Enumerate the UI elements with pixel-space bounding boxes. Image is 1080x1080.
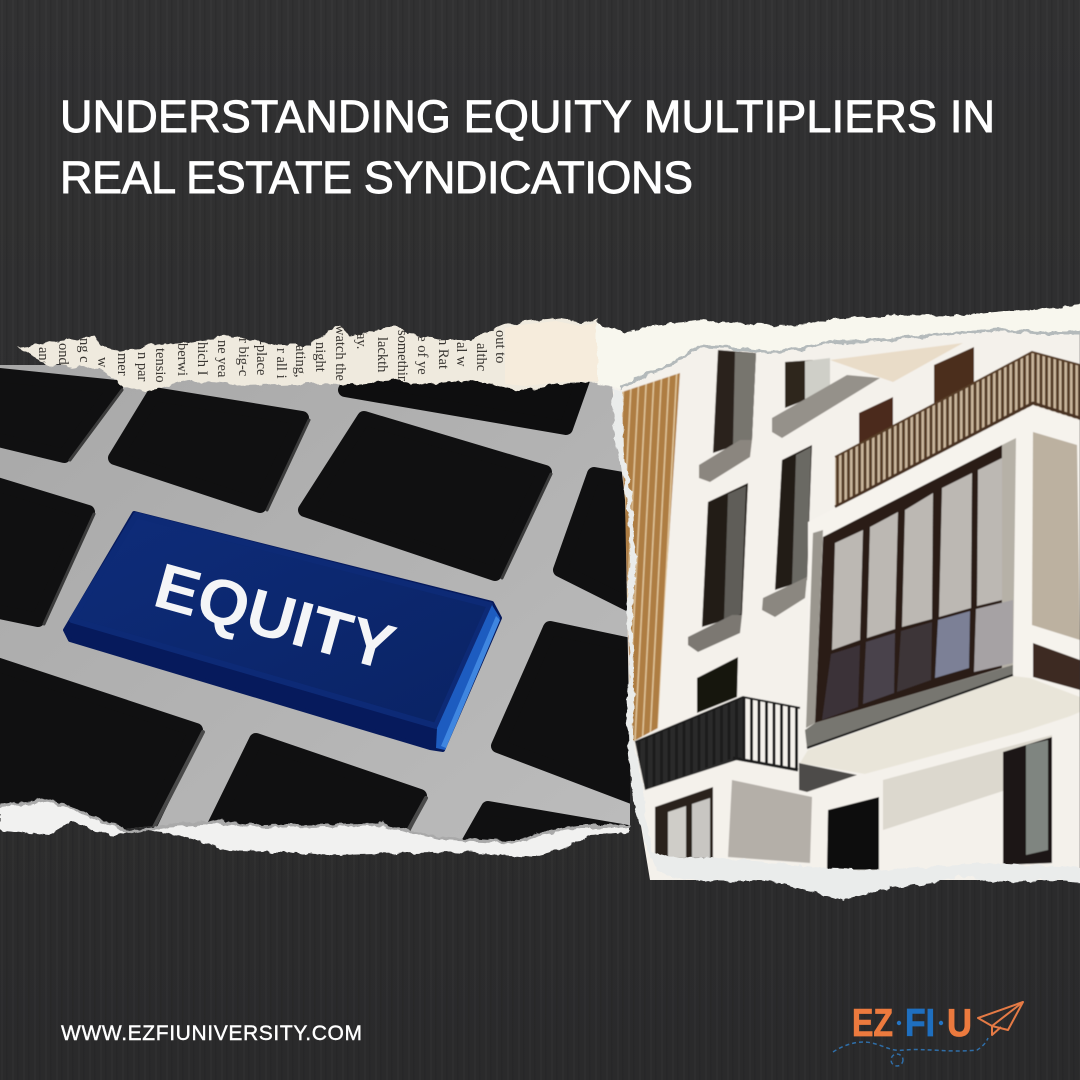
logo: EZ FI U with paper plane: FI [905, 1002, 935, 1045]
flight path [833, 1038, 988, 1066]
newspaper text columns: watch the [332, 325, 348, 381]
website url: WWW.EZFIUNIVERSITY.COM [61, 1022, 362, 1045]
newspaper text columns: hich I [194, 342, 210, 376]
lower balcony base [645, 758, 812, 870]
upper windows [713, 350, 756, 453]
logo: EZ FI U with paper plane [833, 1002, 1023, 1066]
newspaper text columns: ne yea [214, 340, 230, 378]
newspaper text columns: r big-c [235, 338, 251, 376]
newspaper text columns: night [312, 342, 328, 372]
bay box [807, 488, 874, 552]
torn newspaper strip [16, 318, 600, 392]
wood slat cladding [622, 373, 680, 742]
newspaper text columns: n par [134, 352, 150, 382]
newspaper text columns: ating, [292, 345, 308, 378]
newspaper text columns: and [35, 347, 51, 369]
upper railing [835, 352, 1080, 507]
newspaper text columns: -place [253, 340, 269, 375]
key: blue equity key [65, 513, 500, 750]
lower railing [635, 697, 743, 790]
newspaper text columns [35, 325, 508, 384]
icon: paper plane [978, 1002, 1023, 1035]
newspaper text columns: berwi [174, 343, 190, 376]
logo: EZ FI U with paper plane: U [947, 1002, 972, 1045]
photo: apartment building [610, 325, 1080, 885]
newspaper text columns: n Rat [435, 338, 451, 369]
title [60, 91, 995, 203]
newspaper text columns: r all i [273, 348, 289, 379]
newspaper text columns: althc [473, 343, 489, 371]
newspaper text columns: ng c [76, 338, 92, 363]
photo: keyboard with equity key [0, 365, 640, 865]
soffit [830, 343, 963, 382]
logo: EZ FI U with paper plane: EZ [852, 1002, 893, 1045]
newspaper text columns: ne of ye [414, 328, 430, 375]
title: UNDERSTANDING EQUITY MULTIPLIERS IN [60, 91, 995, 142]
mid windows [702, 483, 748, 627]
title: REAL ESTATE SYNDICATIONS [60, 152, 693, 203]
lower shaded wall [866, 712, 1080, 777]
gray band and soffit [805, 665, 1013, 748]
newspaper text columns: tensio [152, 348, 168, 383]
newspaper text columns: al w [453, 342, 469, 367]
window panes lower [822, 600, 1013, 720]
window panes upper [832, 458, 1002, 650]
newspaper text columns: mer [114, 353, 130, 376]
torn paper frame around building [597, 305, 1080, 900]
torn paper: below keyboard [0, 800, 630, 858]
newspaper text columns: lackth [374, 337, 390, 373]
newspaper text columns: ond [55, 343, 71, 366]
key label: EQUITY: EQUITY [147, 549, 403, 684]
newspaper text columns: out to [492, 330, 508, 363]
newspaper text columns: w [94, 357, 110, 368]
blank cream paper end [505, 321, 600, 386]
newspaper text columns: ay. [353, 333, 369, 349]
newspaper text columns: somethin [394, 330, 410, 384]
